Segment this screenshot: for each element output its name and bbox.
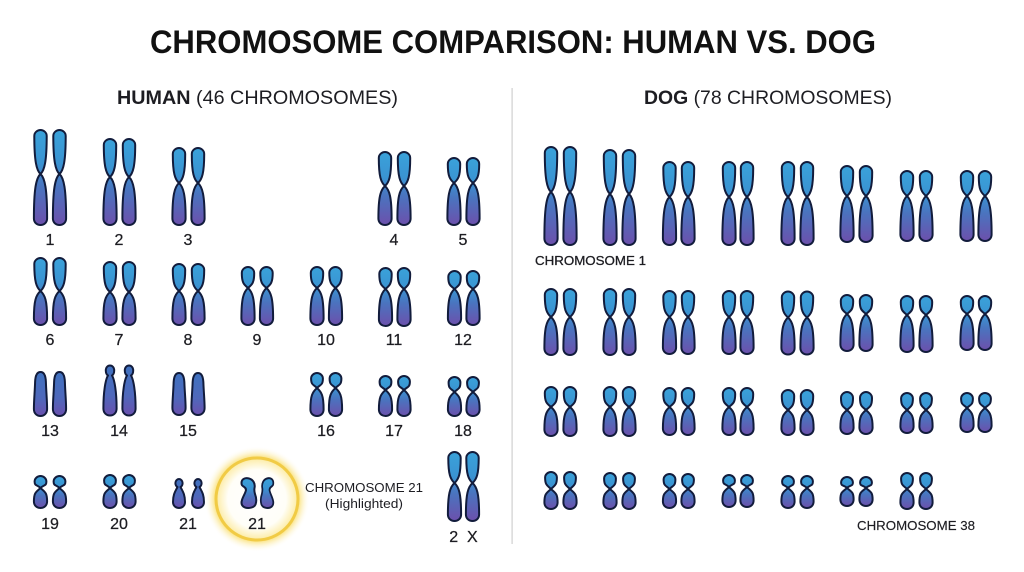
label 1: 1 xyxy=(46,232,55,249)
title: CHROMOSOME COMPARISON: HUMAN VS. DOG xyxy=(150,24,876,60)
human chromosome pair 14 xyxy=(103,366,136,416)
human chromosome pair 20 xyxy=(103,475,136,508)
label 17: 17 xyxy=(385,423,403,440)
dog row 2 chromosomes xyxy=(544,289,992,355)
label 2: 2 xyxy=(115,232,124,249)
human chromosome pair 15 xyxy=(172,373,205,415)
label 20: 20 xyxy=(110,516,128,533)
label 19: 19 xyxy=(41,516,59,533)
human chromosome pair 4 xyxy=(378,152,411,225)
human chromosome pair 16 xyxy=(310,373,342,416)
label 13: 13 xyxy=(41,423,59,440)
dog row 1 chromosomes xyxy=(544,147,992,245)
label 2 X: 2 X xyxy=(449,529,478,546)
human chromosome pair 7 xyxy=(103,262,136,325)
human chromosome pair 13 xyxy=(34,372,66,416)
label highlighted 21: 21 xyxy=(248,516,266,533)
sex chromosome pair X xyxy=(448,452,479,521)
highlighted chromosome 21 pair xyxy=(242,478,273,508)
human chromosome pair 10 xyxy=(310,267,342,325)
callout: chromosome 21 highlighted: CHROMOSOME 21 xyxy=(305,480,423,495)
human chromosome pair 17 xyxy=(379,376,411,416)
heading: human: HUMAN (46 CHROMOSOMES) xyxy=(117,88,398,109)
dog row 3 chromosomes xyxy=(544,387,992,436)
label 11: 11 xyxy=(386,332,402,349)
human chromosome pair 6 xyxy=(34,258,66,325)
human chromosome pair 21 xyxy=(173,479,204,508)
label 5: 5 xyxy=(459,232,468,249)
highlight glow ring xyxy=(204,446,310,552)
label 10: 10 xyxy=(317,332,335,349)
label 21: 21 xyxy=(179,516,197,533)
human chromosome pair 19 xyxy=(34,476,66,508)
label 7: 7 xyxy=(115,332,124,349)
label 18: 18 xyxy=(454,423,472,440)
label 9: 9 xyxy=(253,332,262,349)
label 3: 3 xyxy=(184,232,193,249)
label 15: 15 xyxy=(179,423,197,440)
label 14: 14 xyxy=(110,423,128,440)
panel: dog xyxy=(535,88,992,533)
label chromosome 1: CHROMOSOME 1 xyxy=(535,253,646,268)
callout: chromosome 21 highlighted: (Highlighted) xyxy=(325,496,403,511)
human chromosome pair 8 xyxy=(172,264,205,325)
human chromosome pair 3 xyxy=(172,148,205,225)
label 16: 16 xyxy=(317,423,335,440)
label 6: 6 xyxy=(46,332,55,349)
human chromosome pair 5 xyxy=(447,158,480,225)
human chromosome pair 9 xyxy=(241,267,273,325)
human chromosome pair 11 xyxy=(379,268,411,326)
panel: human xyxy=(34,88,480,552)
callout: chromosome 21 highlighted xyxy=(305,480,423,511)
human chromosome pair 1 xyxy=(34,130,66,225)
dog row 4 chromosomes xyxy=(544,472,933,509)
label 12: 12 xyxy=(454,332,472,349)
label chromosome 38: CHROMOSOME 38 xyxy=(857,518,975,533)
human chromosome pair 12 xyxy=(448,271,480,325)
label 4: 4 xyxy=(390,232,399,249)
human chromosome pair 2 xyxy=(103,139,136,225)
divider between panels xyxy=(512,88,513,544)
human chromosome pair 18 xyxy=(448,377,480,416)
heading: dog: DOG (78 CHROMOSOMES) xyxy=(644,88,892,109)
label 8: 8 xyxy=(184,332,193,349)
